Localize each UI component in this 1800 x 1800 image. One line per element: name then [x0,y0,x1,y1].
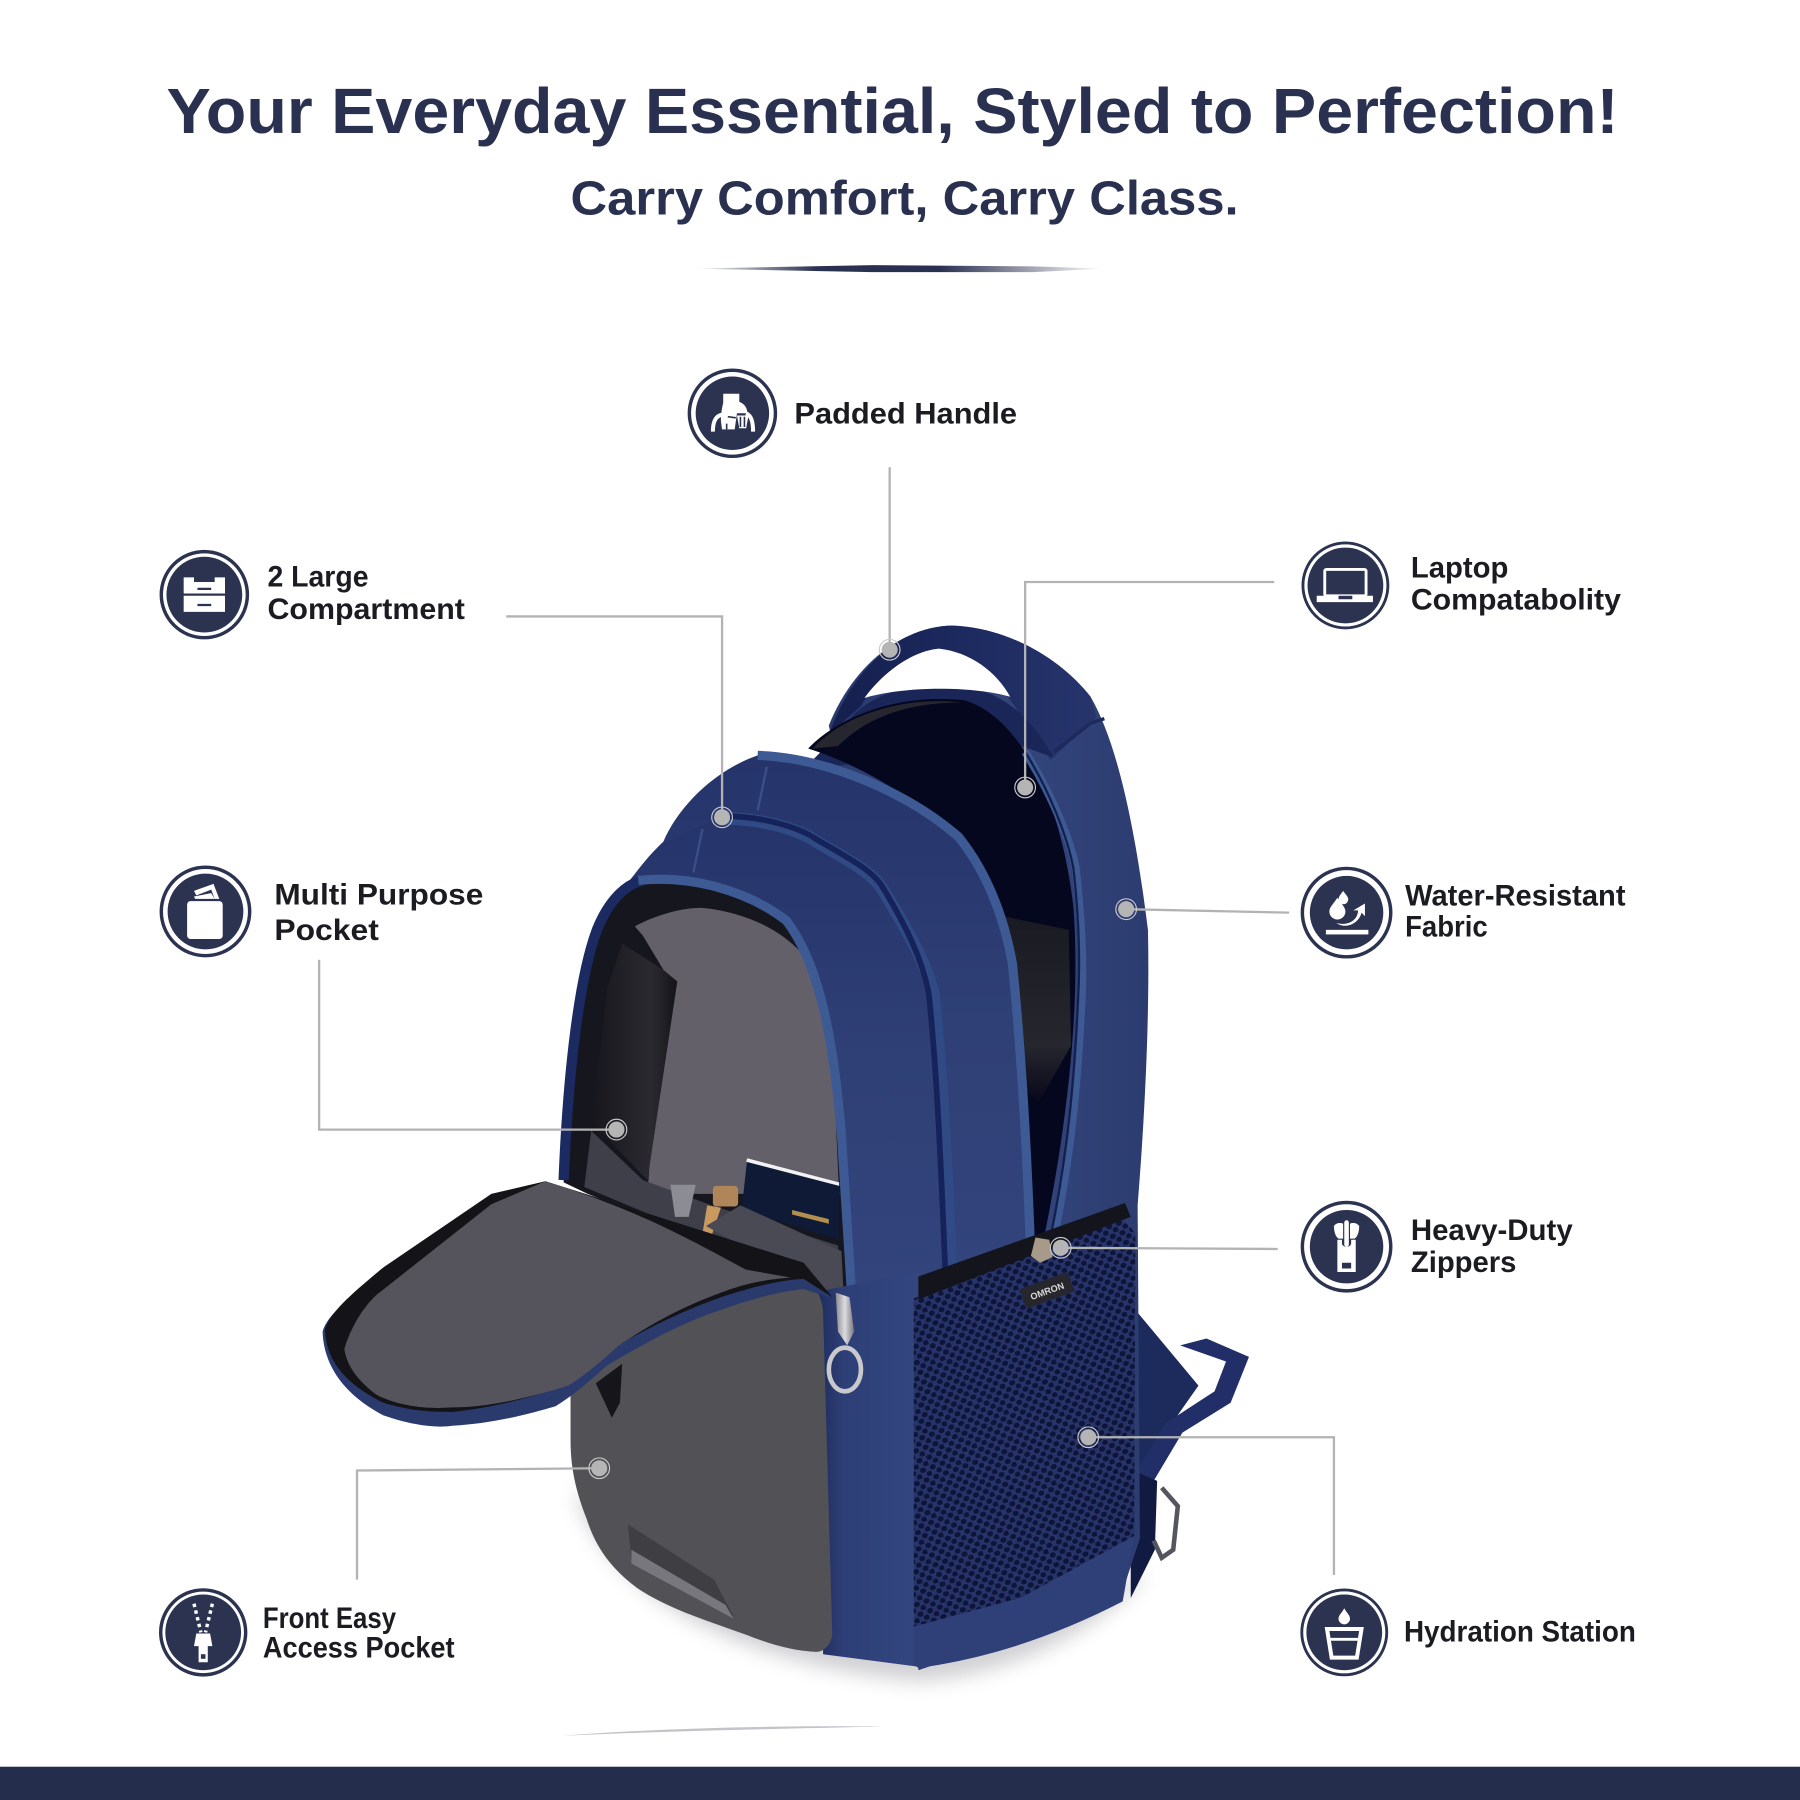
callout: padded handle [689,370,1017,660]
icon: cup and drop [1302,1590,1387,1675]
anchor dot [1078,1427,1099,1448]
anchor dot [606,1119,627,1140]
callout: water resistant [1116,868,1626,957]
callout: 2 large compartment [161,552,732,828]
heading divider [692,265,1104,272]
middle compartment shell [664,758,1031,1291]
label: Hydration Station [1404,1616,1636,1649]
front pocket interior [564,879,852,1303]
handle base band [804,685,1054,769]
icon: pocket [161,867,250,956]
label: Multi Purpose [274,879,483,912]
padded handle [829,626,1096,760]
label [267,561,465,626]
callout: hydration station [1078,1427,1636,1675]
label: Padded Handle [794,398,1017,431]
icon: hand on handle [689,370,775,456]
leader line [1025,582,1274,788]
notebook [742,1158,839,1240]
anchor dot [589,1458,610,1479]
label: Heavy-Duty [1411,1214,1573,1247]
flap tag [596,1364,622,1418]
leader line [506,616,722,817]
icon: drawers [161,552,247,638]
callout: front easy access pocket [161,1458,610,1675]
rear zipper [1025,752,1082,1238]
label: Fabric [1405,911,1488,944]
callout: laptop [1015,543,1621,798]
middle shell seam [758,767,767,810]
anchor dot [712,807,732,828]
flap lining [344,1181,791,1408]
main compartment interior [808,699,1075,1251]
elastic band [918,1203,1131,1299]
label: 2 Large [267,561,368,594]
organiser lip [706,1205,844,1297]
leader line [1126,909,1289,913]
shoulder pad seam [1054,719,1104,752]
side mesh pocket [914,1219,1135,1627]
padded slot [591,944,677,1180]
side tag [1020,1272,1074,1309]
subtitle: Carry Comfort, Carry Class. [571,172,1239,226]
title: Your Everyday Essential, Styled to Perfection! [166,75,1619,147]
leader line [889,467,891,650]
interior rim [813,701,962,748]
anchor dot [1015,777,1035,798]
flap black trim [325,1181,832,1412]
rear straps and buckle [1131,1310,1249,1598]
leader line [319,960,616,1130]
rear shell and top pad [829,626,1148,1670]
label: Water-Resistant [1405,880,1626,913]
bottom band [914,1536,1134,1668]
label: Access Pocket [263,1632,455,1665]
front zipper pull [829,1293,861,1391]
anchor dot [1116,899,1136,920]
callout: heavy duty zippers [1050,1202,1573,1291]
front shell seam [693,829,703,872]
label: Compartment [267,593,465,626]
second zipper [719,818,952,1287]
anchor dot [879,639,900,660]
backpack illustration [323,626,1249,1736]
anchor dot [1050,1238,1071,1258]
gold pen [703,1186,738,1235]
label [1411,551,1621,617]
icon: zipper [1302,1202,1391,1291]
icon: zip pull [161,1590,246,1675]
organiser fabric [584,1131,844,1303]
label [1411,1214,1573,1279]
label [1405,880,1626,944]
side panel [817,1272,920,1667]
flap outer edge [323,1181,832,1427]
handle opening [864,649,1010,698]
icon: laptop [1303,543,1388,628]
label: Compatabolity [1411,584,1621,617]
pocket left zip [564,880,643,1180]
floor reflection [562,1726,884,1736]
laptop sleeve [996,915,1071,1102]
leader line [1061,1248,1278,1249]
middle zipper [758,755,1031,1260]
silver pen [670,1185,696,1217]
leader line [1088,1437,1334,1575]
front compartment shell [608,818,954,1303]
callout: multi purpose pocket [161,867,627,1140]
side tag: OMRON [1029,1281,1066,1302]
icon: water drops [1302,868,1391,957]
side zipper pull [1031,1238,1053,1263]
ground shadow [574,1492,1148,1682]
grey lining [635,908,839,1194]
grey front panel [571,1274,832,1652]
lower reflective patch [628,1524,734,1619]
pocket rim [564,879,852,1297]
footer bar [0,1767,1800,1800]
label [263,1602,455,1665]
label: Pocket [274,914,379,947]
pocket zipper [638,879,852,1297]
label: Zippers [1411,1246,1516,1279]
label: Laptop [1411,551,1508,584]
leader line [357,1468,599,1580]
label: Front Easy [263,1602,396,1635]
open flap [323,1181,832,1427]
label [274,879,483,947]
rounded shell base [597,755,804,932]
